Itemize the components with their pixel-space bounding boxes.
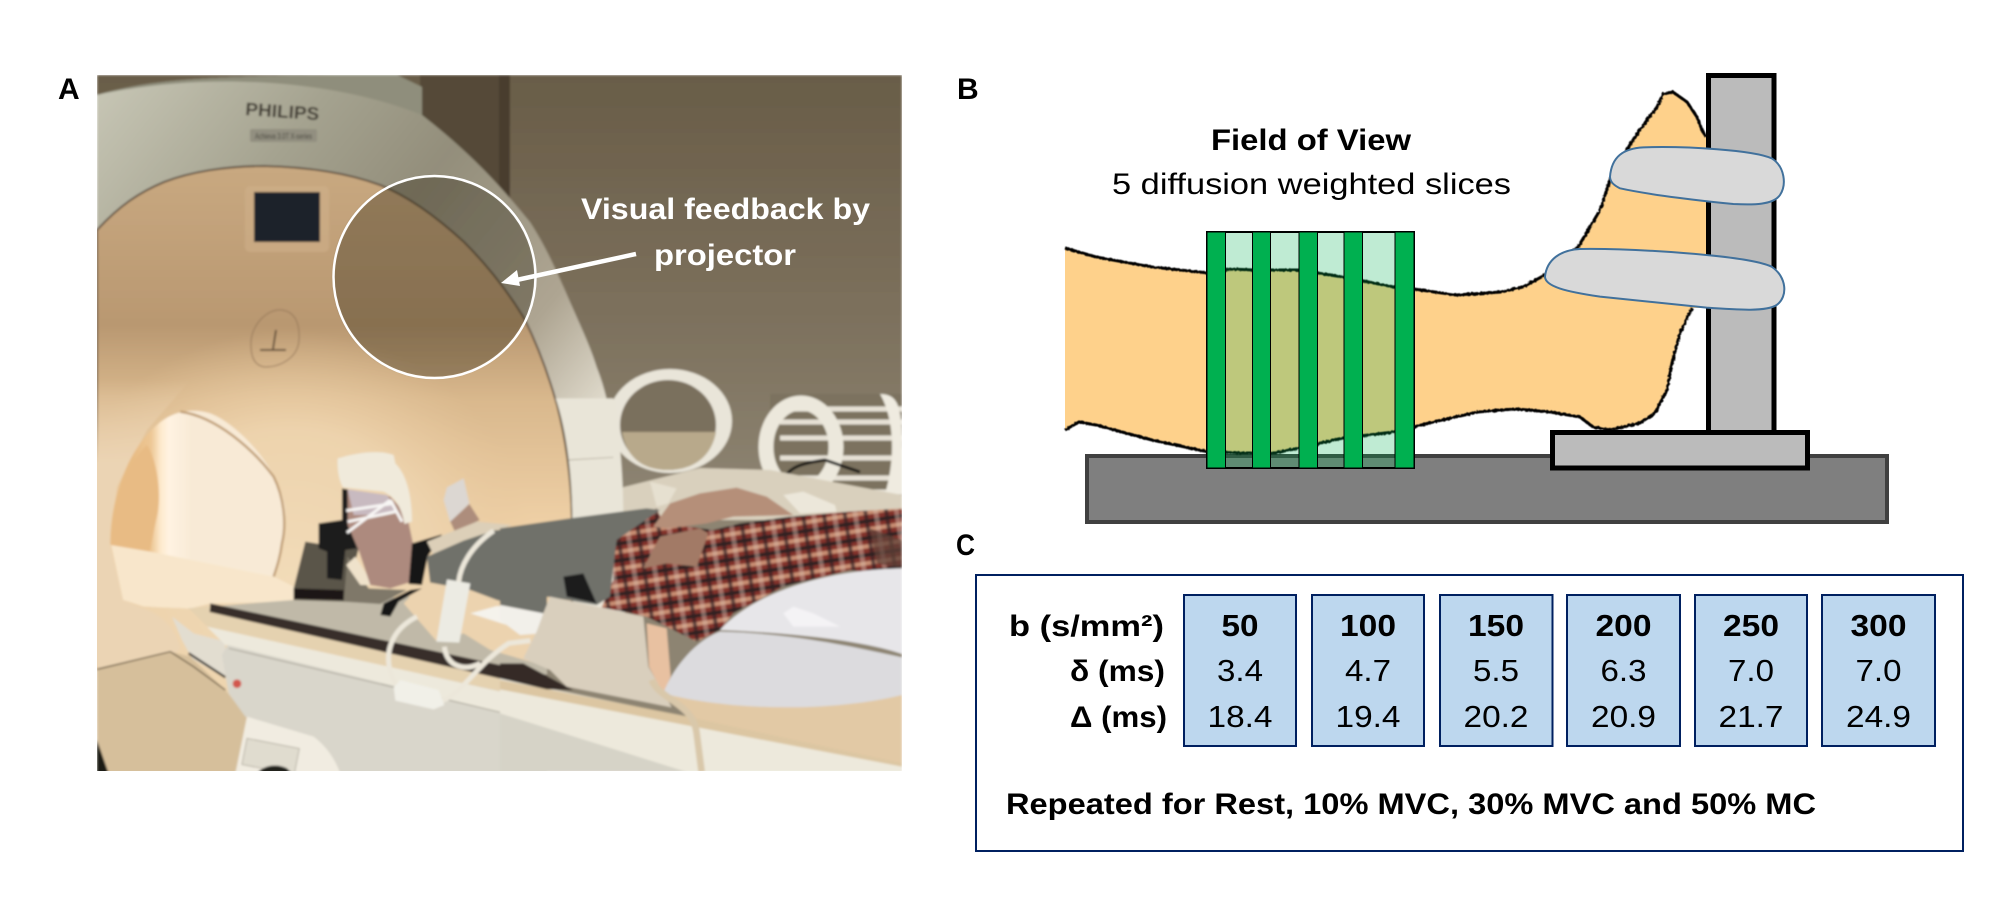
panel border <box>976 575 1963 851</box>
upper strap <box>1610 147 1784 204</box>
Philips logo and model plate <box>245 99 320 142</box>
column b=200: 6.3 <box>1600 653 1646 688</box>
Philips logo and model plate: PHILIPS <box>245 99 320 124</box>
field of view slices <box>1207 232 1414 468</box>
label A: A <box>58 73 80 106</box>
foot plate post <box>1708 76 1774 436</box>
scanner face <box>97 166 572 640</box>
row labels: Δ (ms) <box>1070 701 1167 734</box>
wall <box>97 75 902 771</box>
scanner table <box>1087 456 1887 522</box>
flare around bore <box>97 352 438 700</box>
column b=300: 24.9 <box>1846 699 1911 734</box>
column b=50 <box>1184 595 1296 746</box>
column b=250 <box>1695 595 1807 746</box>
lower-left cover <box>97 652 247 773</box>
display screen <box>246 191 328 251</box>
column b=100: 19.4 <box>1336 699 1400 734</box>
shirt <box>602 508 902 642</box>
scanner shell <box>97 75 625 640</box>
wrap on calf <box>427 522 512 555</box>
top cap of scanner <box>97 75 422 115</box>
column b=50: 18.4 <box>1208 699 1272 734</box>
column b=50: 3.4 <box>1217 653 1263 688</box>
repeated conditions note: Repeated for Rest, 10% MVC, 30% MVC and 50% MC <box>1006 788 1816 821</box>
Philips logo and model plate: Achieva 3.0T X-series <box>255 132 312 141</box>
table surface <box>223 595 548 676</box>
black strip <box>210 603 547 689</box>
other foot <box>444 478 469 523</box>
black leg band <box>409 534 442 585</box>
column b=200: 200 <box>1596 608 1652 643</box>
annotation: visual feedback by projector <box>581 193 870 272</box>
heading: field of view: 5 diffusion weighted slices <box>1112 168 1511 201</box>
lower scanner and patient, coordinates of left crop <box>94 380 547 775</box>
bandage around foot <box>338 452 412 524</box>
column b=200: 20.9 <box>1591 699 1656 734</box>
black foot support <box>294 488 359 602</box>
shorts <box>427 525 547 615</box>
cage coil with bars <box>766 394 902 499</box>
column b=150 <box>1440 595 1552 746</box>
projector area tint <box>333 176 535 378</box>
bore opening <box>110 410 284 576</box>
photo <box>97 75 902 771</box>
annotation: visual feedback by projector: Visual feedback by <box>581 193 870 226</box>
white label box <box>235 717 340 773</box>
scanner shell lower band <box>555 398 623 522</box>
column b=200 <box>1567 595 1680 746</box>
gap between cover and table <box>172 617 225 678</box>
cuff <box>523 597 672 707</box>
column b=150: 5.5 <box>1473 653 1519 688</box>
forearm <box>643 528 708 568</box>
column b=250: 7.0 <box>1728 653 1774 688</box>
pillow lower <box>663 632 902 707</box>
column b=250: 21.7 <box>1718 699 1784 734</box>
sensor clip <box>436 579 470 643</box>
highlight circle <box>334 176 536 378</box>
column b=100 <box>1312 595 1424 746</box>
face handle <box>251 310 299 367</box>
back coil ring <box>608 369 732 473</box>
lower strap <box>1545 249 1784 310</box>
panel C: diffusion parameter table <box>976 575 1963 851</box>
foot <box>348 489 414 588</box>
laces <box>346 500 402 533</box>
sensor cables <box>389 531 530 702</box>
column b=100: 4.7 <box>1345 653 1391 688</box>
back brackets <box>650 482 677 507</box>
column b=250: 250 <box>1723 608 1779 643</box>
straps <box>1545 147 1784 310</box>
column b=300: 7.0 <box>1856 653 1902 688</box>
column b=150: 150 <box>1468 608 1524 643</box>
label C: C <box>956 529 975 562</box>
patient torso and right side, coordinates of right crop <box>500 398 902 772</box>
leg pad <box>404 581 536 662</box>
annotation: visual feedback by projector: projector <box>654 239 796 272</box>
left bore lip <box>97 390 168 670</box>
panel B: leg diagram <box>1065 76 1887 522</box>
column b=300 <box>1822 595 1935 746</box>
pillow upper <box>720 568 902 654</box>
upper mattress band <box>500 678 902 772</box>
column b=300: 300 <box>1850 608 1906 643</box>
tan table edge <box>192 606 501 692</box>
column b=50: 50 <box>1222 608 1258 643</box>
hand and arm <box>653 488 793 528</box>
column b=150: 20.2 <box>1464 699 1528 734</box>
table side band <box>208 626 502 713</box>
heading: field of view <box>1112 124 1511 201</box>
thick cable <box>652 680 702 772</box>
label B: B <box>957 73 979 106</box>
row labels: b (s/mm²) <box>1009 610 1164 643</box>
white cloth <box>500 605 543 635</box>
grey side panel <box>224 645 502 771</box>
panel A: photo of MRI scanner with participant <box>97 75 902 771</box>
column b=100: 100 <box>1340 608 1396 643</box>
leg outline <box>1065 92 1706 453</box>
row labels: δ (ms) <box>1070 655 1165 688</box>
arrow to projector <box>501 254 636 286</box>
clutter on shelf <box>620 468 902 520</box>
heading: field of view: Field of View <box>1211 124 1412 157</box>
shorts upper <box>500 508 660 613</box>
leg and foot fill <box>1065 92 1706 453</box>
foot plate base <box>1552 432 1808 468</box>
row labels <box>1009 610 1167 734</box>
